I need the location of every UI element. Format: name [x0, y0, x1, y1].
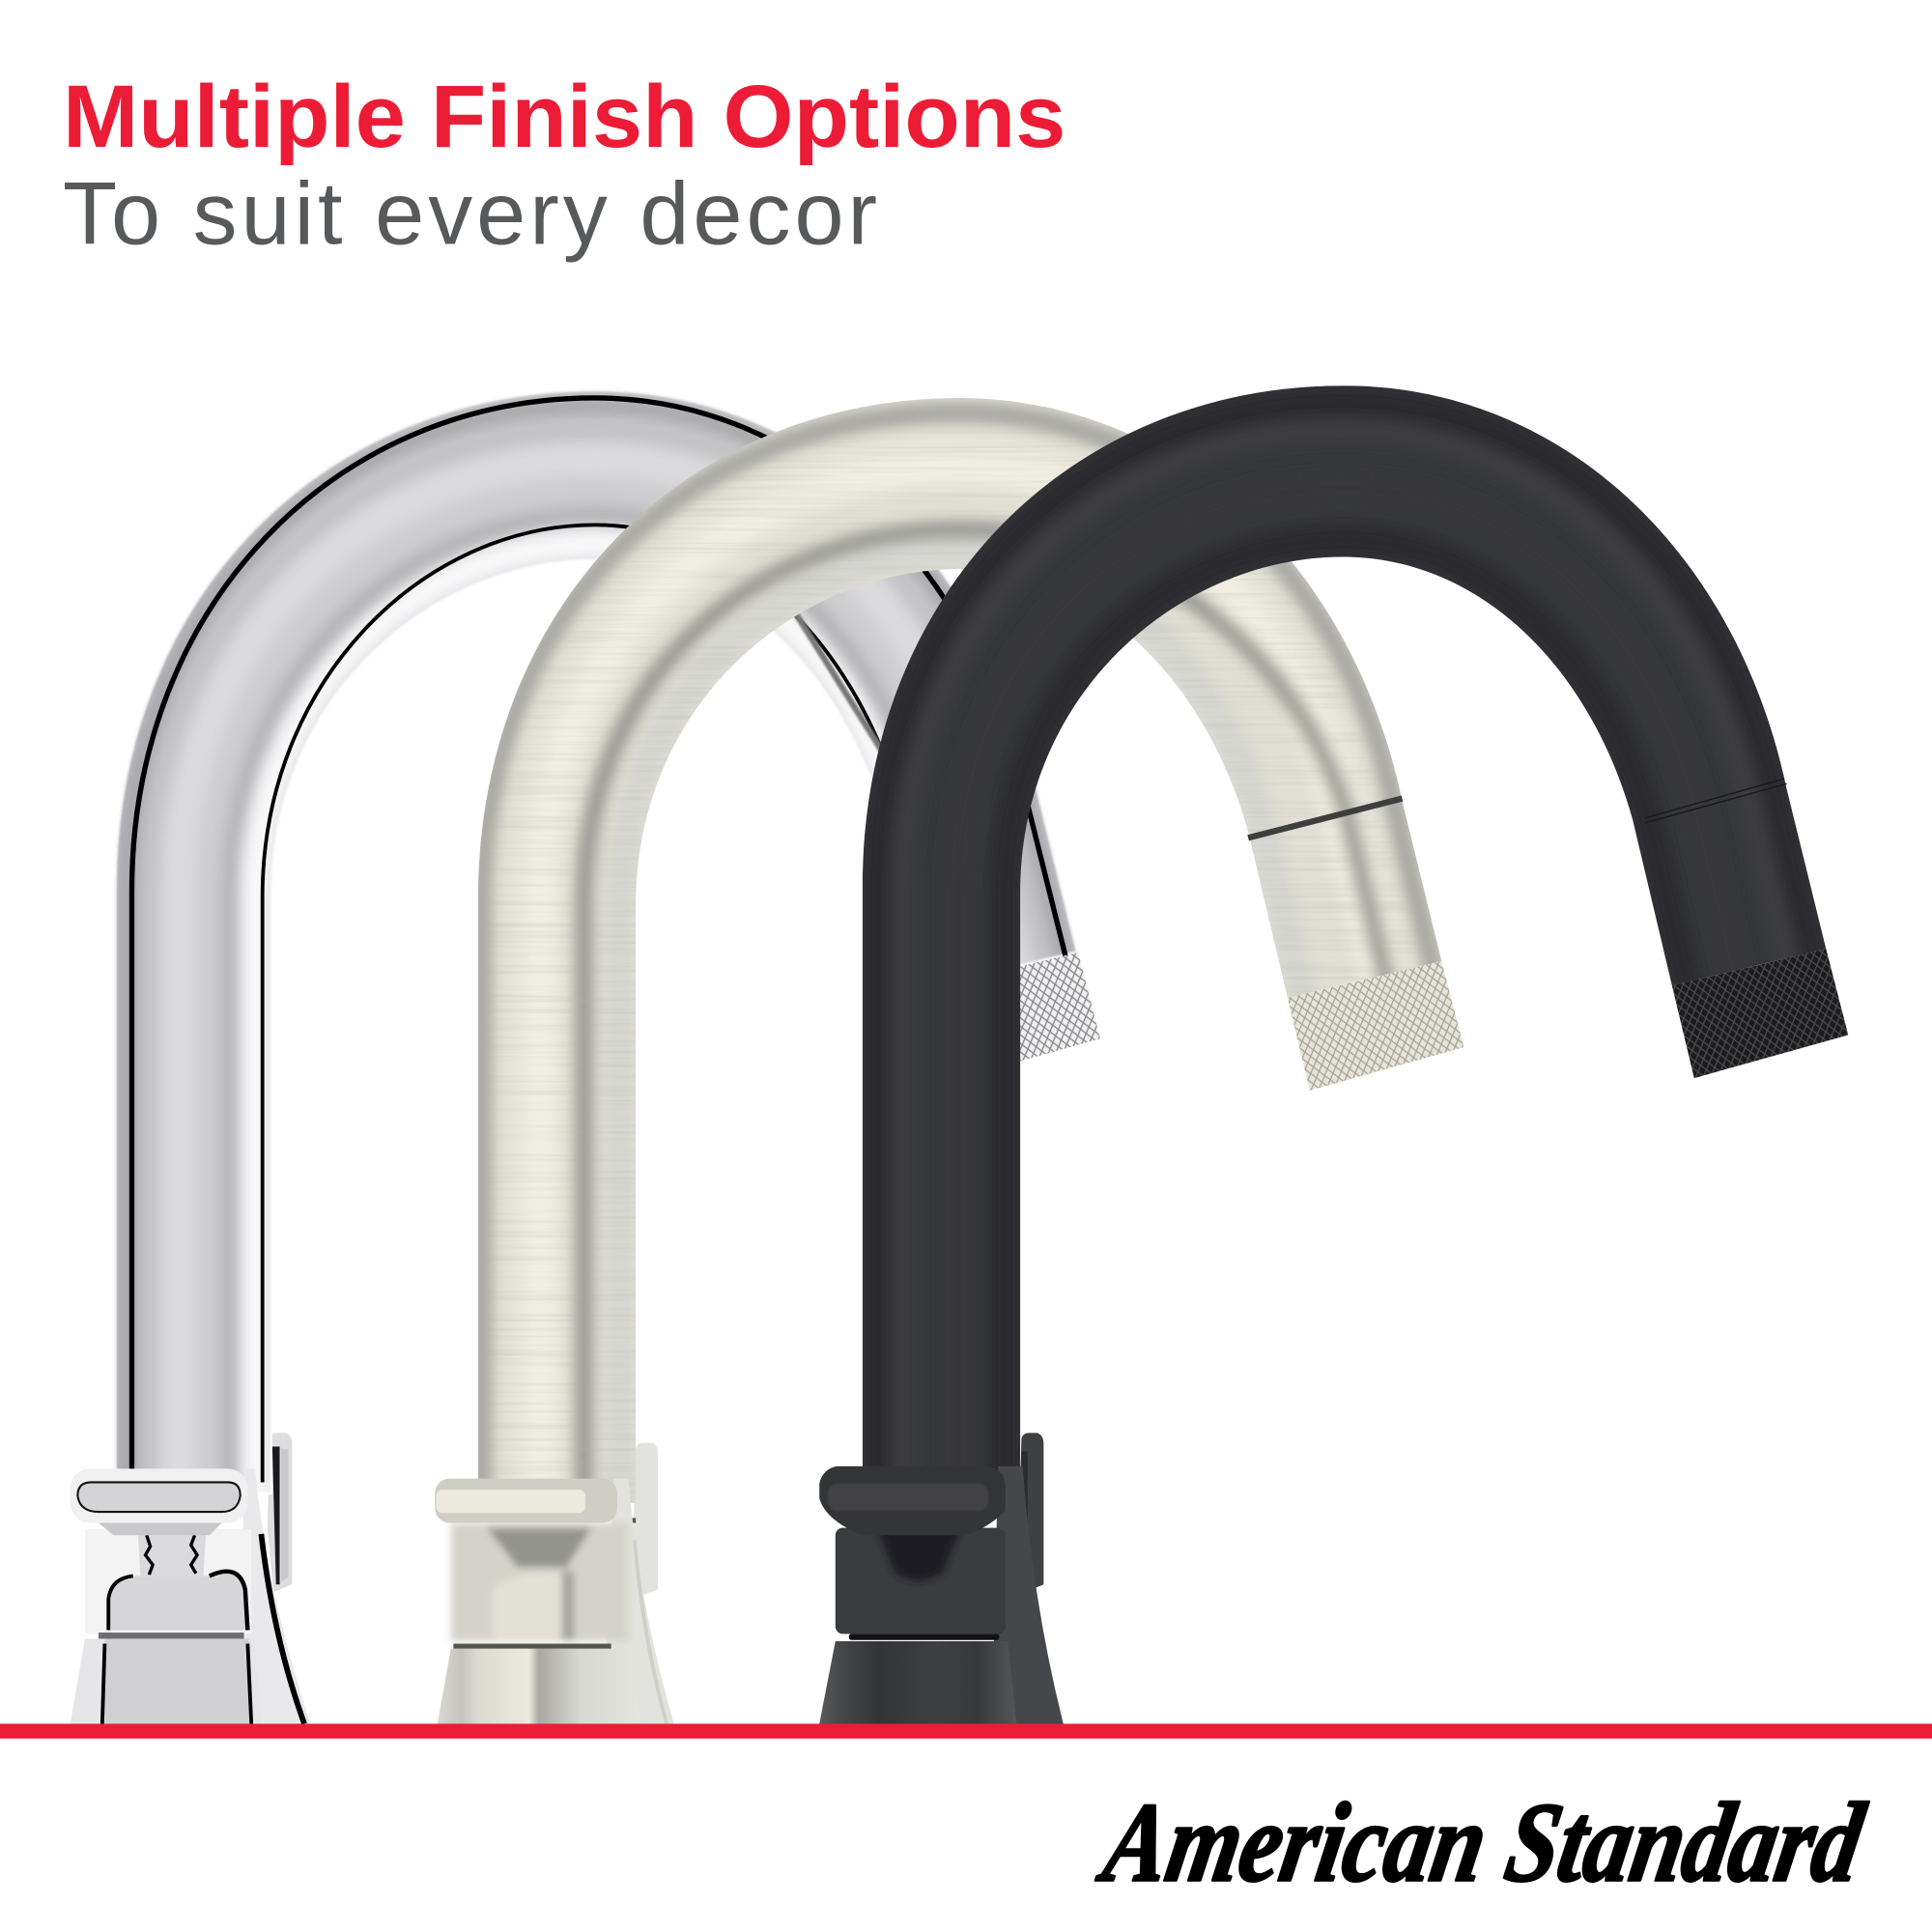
- nickel dark band: [1248, 799, 1403, 838]
- nickel spout tube: [466, 382, 1463, 1528]
- black spout tube: [863, 385, 1848, 1516]
- chrome spout tube: [115, 389, 1100, 1520]
- chrome handle behind spout: [268, 1433, 292, 1592]
- black seam lines: [1645, 779, 1786, 823]
- chrome outer reflection line: [131, 398, 1065, 1482]
- red baseline bar: [0, 1723, 1932, 1739]
- chrome base: [71, 1468, 310, 1723]
- title: Multiple Finish Options: [63, 68, 1065, 166]
- brushed metal texture: [498, 446, 1408, 1470]
- chrome knurled aerator: [924, 952, 1100, 1082]
- faucet: polished chrome finish: [71, 389, 1100, 1723]
- subtitle: To suit every decor: [63, 165, 877, 264]
- chrome inner reflection line: [263, 525, 916, 1482]
- nickel handle behind spout: [620, 1443, 658, 1597]
- faucet: matte black finish: [819, 385, 1848, 1723]
- black handle behind spout: [1019, 1433, 1043, 1592]
- black knurled aerator: [1672, 949, 1848, 1078]
- nickel base: [435, 1479, 674, 1723]
- black base: [819, 1466, 1064, 1723]
- chrome soft outer edge: [115, 389, 1078, 1494]
- nickel knurled aerator: [1288, 961, 1463, 1091]
- faucet: brushed nickel finish: [435, 382, 1463, 1723]
